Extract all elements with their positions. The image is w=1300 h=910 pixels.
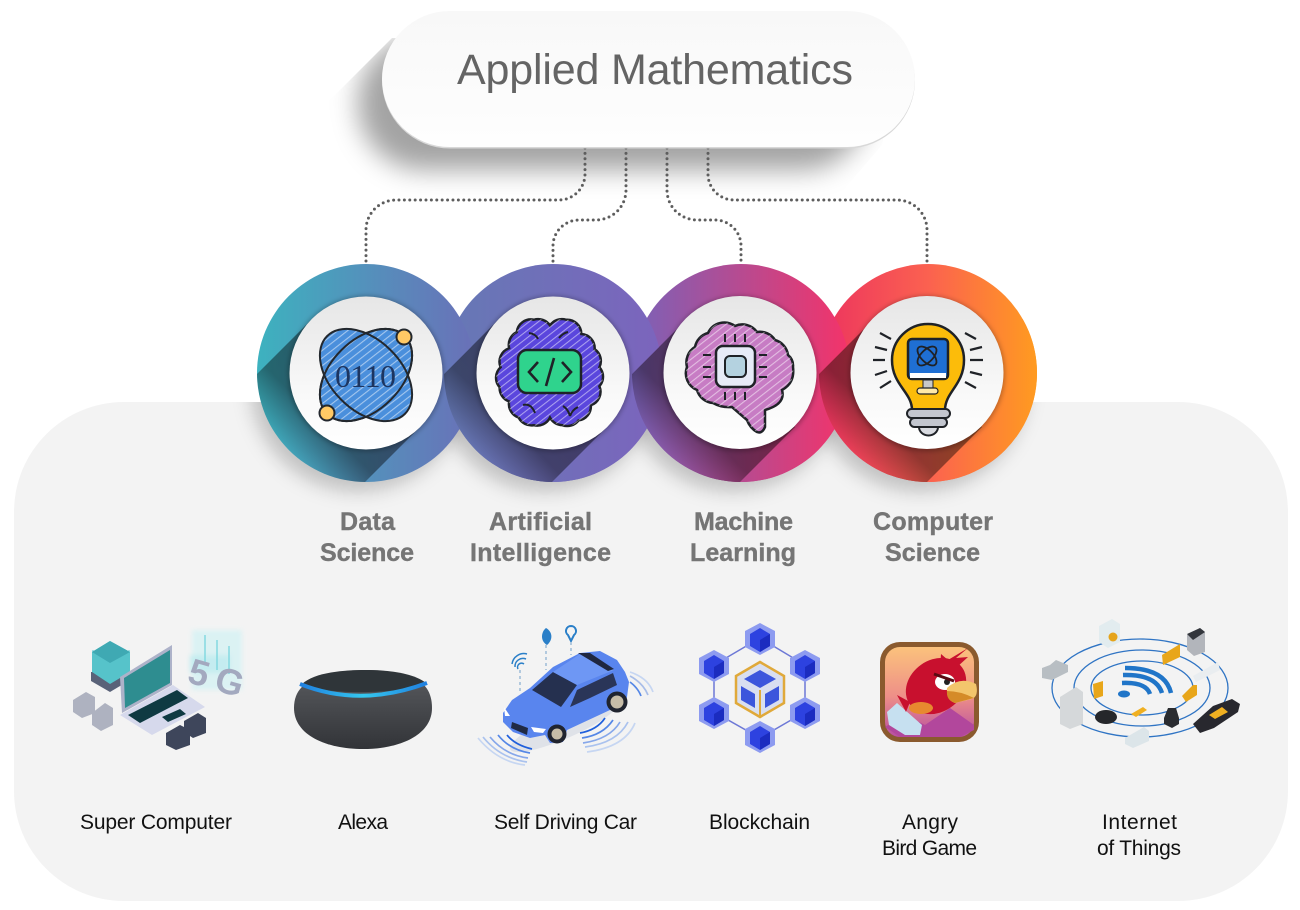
icon: internet of things xyxy=(1042,619,1240,748)
icon: artificial intelligence brain xyxy=(496,319,603,426)
labels: applications: Bird Game xyxy=(882,837,977,860)
icon: super computer: 5G xyxy=(184,650,249,705)
icon: blockchain xyxy=(699,623,820,753)
inner discs xyxy=(288,296,1005,452)
icon: angry bird game xyxy=(880,642,979,742)
icon: super computer xyxy=(73,630,249,750)
icon: computer science bulb xyxy=(873,324,983,435)
title pill xyxy=(382,11,915,148)
icon: self driving car xyxy=(478,626,653,765)
labels: applications: Self Driving Car xyxy=(494,811,637,834)
interlocking gradient rings xyxy=(257,264,1037,482)
labels: applications: of Things xyxy=(1097,837,1181,860)
connectors: dotted lines from title to circles xyxy=(366,148,927,264)
labels: applications: Angry xyxy=(902,811,958,834)
labels: four disciplines: Intelligence xyxy=(470,539,611,567)
labels: four disciplines: Data xyxy=(340,508,396,536)
labels: four disciplines: Science xyxy=(885,539,980,567)
labels: four disciplines xyxy=(320,508,993,567)
icon: data science atom: 0110 xyxy=(335,358,396,394)
panel: applications background xyxy=(14,402,1288,901)
labels: four disciplines: Science xyxy=(320,539,414,567)
title text: Applied Mathematics xyxy=(457,46,853,94)
labels: applications xyxy=(80,811,1181,860)
soft shadow below circles xyxy=(243,402,1035,500)
title pill long shadow xyxy=(358,36,868,170)
icon: data science atom xyxy=(318,328,414,422)
labels: four disciplines: Learning xyxy=(690,539,796,567)
icon: machine learning brain xyxy=(686,323,793,432)
labels: applications: Super Computer xyxy=(80,811,232,834)
icon: alexa smart speaker xyxy=(294,670,432,749)
labels: applications: Alexa xyxy=(338,811,388,834)
labels: four disciplines: Computer xyxy=(873,508,993,536)
labels: four disciplines: Machine xyxy=(694,508,793,536)
labels: applications: Internet xyxy=(1102,811,1177,834)
labels: applications: Blockchain xyxy=(709,811,810,834)
labels: four disciplines: Artificial xyxy=(489,508,592,536)
